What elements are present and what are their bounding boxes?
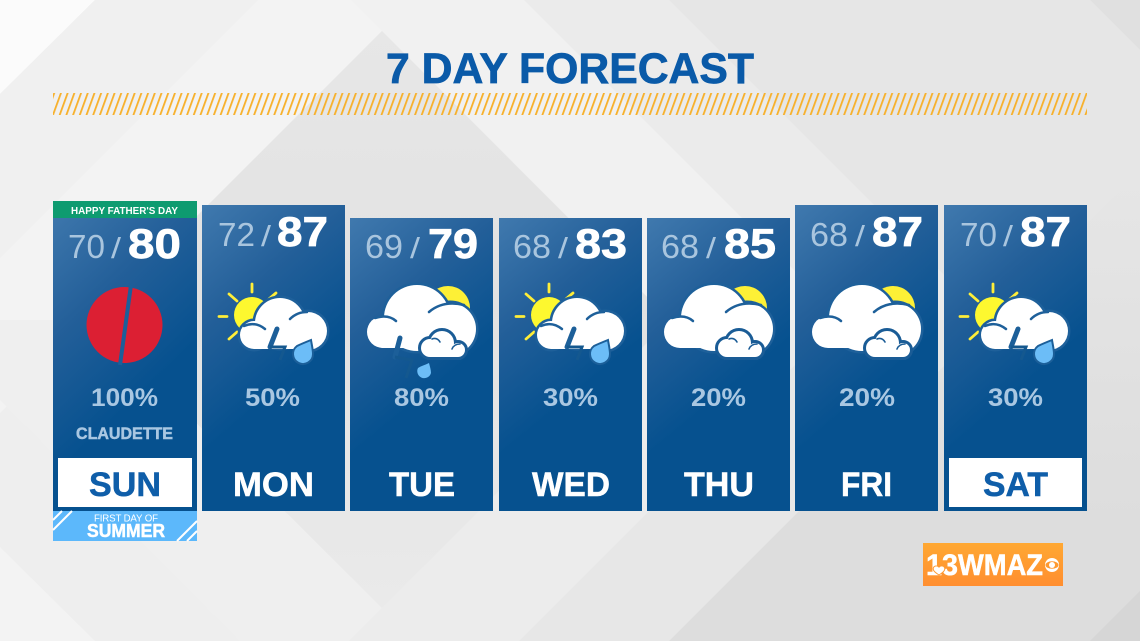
- temperatures: /: [855, 221, 866, 253]
- temperatures: /: [111, 233, 122, 265]
- banner: happy father's day: HAPPY FATHER'S DAY: [71, 206, 178, 217]
- icon: mostly cloudy: [664, 285, 773, 357]
- rain chance: 30%: [988, 384, 1043, 412]
- panel: wednesday: [499, 218, 642, 511]
- day label: [949, 458, 1082, 507]
- rain chance: 20%: [691, 384, 746, 412]
- rain chance: 50%: [245, 384, 300, 412]
- temperatures: 68: [810, 216, 848, 253]
- temperatures: 87: [1020, 208, 1071, 255]
- rain chance: 100%: [91, 384, 158, 412]
- temperatures: 80: [128, 220, 181, 267]
- day label: MON: [233, 466, 314, 504]
- day label: THU: [684, 466, 754, 504]
- panel: saturday: [944, 205, 1087, 511]
- banner: first day of summer: FIRST DAY OF: [94, 514, 158, 524]
- temperatures: /: [261, 221, 272, 253]
- temperatures: [810, 208, 923, 255]
- logo: 13 WMAZ: WMAZ: [958, 549, 1043, 582]
- rain chance: 20%: [839, 384, 895, 412]
- panel: monday: [202, 205, 345, 511]
- temperatures: [68, 220, 181, 267]
- temperatures: 68: [513, 228, 551, 265]
- temperatures: 70: [960, 216, 997, 253]
- temperatures: [513, 220, 627, 267]
- temperatures: 70: [68, 228, 105, 265]
- temperatures: /: [1003, 221, 1014, 253]
- day label: TUE: [389, 466, 455, 504]
- day label: SUN: [89, 466, 161, 504]
- temperatures: 87: [872, 208, 923, 255]
- temperatures: [218, 208, 328, 255]
- banner: first day of summer: [53, 511, 197, 541]
- temperatures: 68: [661, 228, 699, 265]
- temperatures: /: [410, 233, 421, 265]
- logo: 13 WMAZ: 13: [926, 549, 958, 582]
- temperatures: 72: [218, 216, 255, 253]
- temperatures: 87: [277, 208, 328, 255]
- day label: WED: [532, 466, 610, 504]
- banner: happy father's day: [53, 201, 197, 218]
- icon: tropical storm: [86, 285, 162, 365]
- icon: sun and storms: [516, 284, 624, 364]
- rain chance: 80%: [394, 384, 449, 412]
- icon: cloudy with storms: [367, 285, 476, 378]
- hatched divider: [53, 93, 1087, 115]
- temperatures: [960, 208, 1071, 255]
- temperatures: 83: [575, 220, 627, 267]
- day label: FRI: [841, 466, 892, 504]
- banner: first day of summer: SUMMER: [87, 521, 165, 541]
- temperatures: 69: [365, 228, 403, 265]
- icon: mostly cloudy: [812, 285, 921, 357]
- panel: friday: [795, 205, 938, 511]
- panel: tuesday: [350, 218, 493, 511]
- icon: sun and storms: [960, 284, 1068, 364]
- temperatures: [661, 220, 776, 267]
- logo: 13 WMAZ: [923, 543, 1063, 586]
- temperatures: 79: [428, 220, 478, 267]
- panel: sunday: [53, 201, 197, 541]
- temperatures: /: [706, 233, 717, 265]
- title: 7 DAY FORECAST: [386, 45, 754, 93]
- day label: SAT: [983, 466, 1048, 504]
- storm name: CLAUDETTE: [76, 424, 173, 443]
- panel: thursday: [647, 218, 790, 511]
- temperatures: /: [558, 233, 569, 265]
- temperatures: 85: [724, 220, 776, 267]
- icon: sun and storms: [219, 284, 327, 364]
- temperatures: [365, 220, 478, 267]
- rain chance: 30%: [543, 384, 598, 412]
- day label: [58, 458, 192, 507]
